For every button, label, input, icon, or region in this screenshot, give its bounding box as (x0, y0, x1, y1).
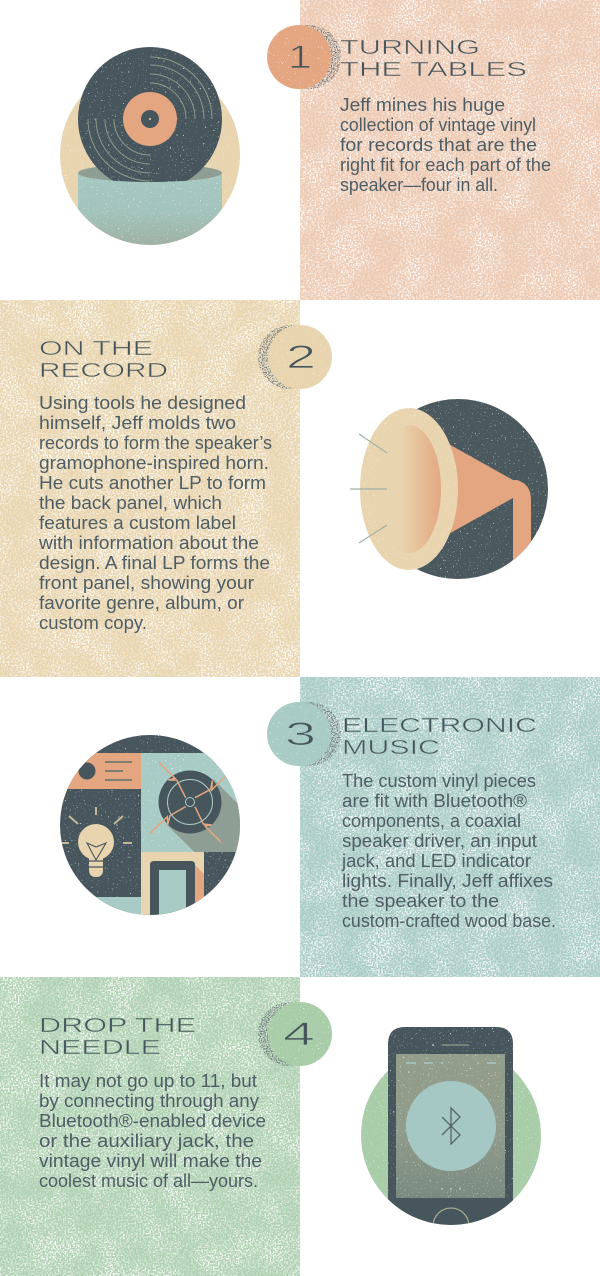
text: step 3 body: The custom vinyl pieces (342, 770, 536, 791)
icon: light bulb (62, 807, 132, 877)
text: step 2 body: the back panel, which (39, 492, 222, 513)
text: step 2 body: Using tools he designed (39, 392, 246, 413)
text: step 1 body: right fit for each part of the (340, 154, 551, 175)
text: step 2 body (38, 392, 272, 633)
text: step 1 body (340, 94, 551, 195)
text: step 1 body: speaker—four in all. (340, 174, 498, 195)
badge: number 4 (258, 1002, 332, 1066)
icon: vinyl record in bowl (60, 47, 240, 250)
text: step 2 body: gramophone-inspired horn. (39, 452, 269, 473)
text: step 1 body: collection of vintage vinyl (340, 114, 536, 135)
panel: step 1 background (300, 0, 600, 300)
text: step 2 body: records to form the speaker’s (39, 432, 272, 453)
text: step 4 body: by connecting through any (39, 1090, 260, 1111)
badge: number 3 (267, 702, 341, 766)
heading: drop the needle: NEEDLE (39, 1037, 161, 1059)
text: step 2 body: He cuts another LP to form (39, 472, 266, 493)
text: step 1 body: for records that are the (340, 134, 537, 155)
badge: number 1: 1 (288, 39, 312, 75)
heading: drop the needle: DROP THE (39, 1015, 196, 1037)
text: step 4 body: coolest music of all—yours. (39, 1170, 258, 1191)
panel: step 3 background (300, 677, 600, 977)
heading: electronic music (342, 715, 537, 759)
heading: on the record (39, 338, 168, 382)
heading: on the record: ON THE (39, 338, 153, 360)
text: step 3 body: the speaker to the (342, 890, 499, 911)
badge: number 4: 4 (283, 1016, 315, 1052)
badge: number 3: 3 (285, 716, 316, 752)
panel: step 2 background (0, 300, 300, 677)
heading: turning the tables (340, 37, 527, 81)
icon: electronics collage (60, 735, 240, 915)
text: step 4 body: or the auxiliary jack, the (39, 1130, 254, 1151)
icon: gramophone horn (350, 399, 548, 579)
heading: electronic music: ELECTRONIC (342, 715, 537, 737)
text: step 3 body: are fit with Bluetooth® (342, 790, 527, 811)
text: step 3 body: components, a coaxial (342, 810, 521, 831)
text: step 3 body: jack, and LED indicator (341, 850, 531, 871)
text: step 4 body (39, 1070, 266, 1191)
badge: number 2: 2 (286, 339, 316, 375)
text: step 2 body: design. A final LP forms the (39, 552, 270, 573)
text: step 2 body: favorite genre, album, or (39, 592, 244, 613)
badge: number 2 (258, 325, 332, 389)
heading: on the record: RECORD (39, 360, 168, 382)
text: step 2 body: himself, Jeff molds two (39, 412, 236, 433)
text: step 2 body: with information about the (38, 532, 259, 553)
text: step 3 body: lights. Finally, Jeff affixes (342, 870, 553, 891)
text: step 3 body: speaker driver, an input (342, 830, 537, 851)
heading: electronic music: MUSIC (342, 737, 440, 759)
text: step 4 body: Bluetooth®-enabled device (39, 1110, 266, 1131)
badge: number 1 (267, 25, 341, 89)
text: step 4 body: vintage vinyl will make the (39, 1150, 262, 1171)
text: step 4 body: It may not go up to 11, but (39, 1070, 257, 1091)
text: step 2 body: features a custom label (39, 512, 236, 533)
text: step 2 body: front panel, showing your (39, 572, 254, 593)
text: step 3 body: custom-crafted wood base. (342, 910, 556, 931)
heading: drop the needle (39, 1015, 196, 1059)
icon: phone with bluetooth (361, 1027, 541, 1244)
text: step 1 body: Jeff mines his huge (340, 94, 505, 115)
text: step 3 body (341, 770, 556, 931)
heading: turning the tables: THE TABLES (340, 59, 527, 81)
panel: step 4 background (0, 977, 300, 1276)
heading: turning the tables: TURNING (340, 37, 480, 59)
text: step 2 body: custom copy. (39, 612, 147, 633)
